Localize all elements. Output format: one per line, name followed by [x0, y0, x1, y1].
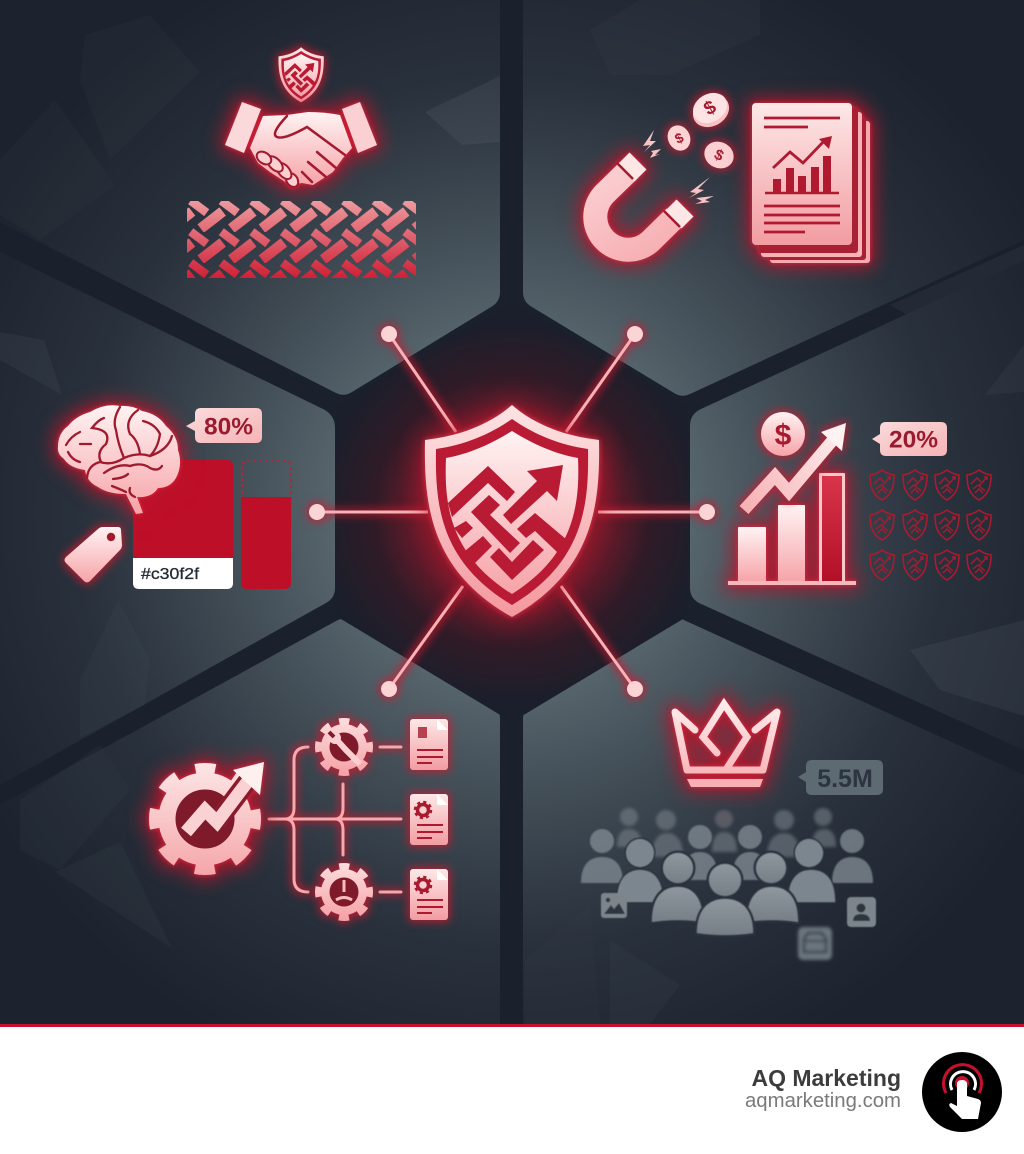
section: handshake and weave [187, 47, 416, 278]
callout: 20 percent: 20% [889, 426, 938, 454]
section: brain and colour swatch [58, 405, 291, 589]
80 percent bar [241, 461, 291, 589]
panel: bottom left [0, 618, 500, 1024]
logo [922, 1052, 1002, 1132]
icon: blurred box tile [798, 927, 832, 960]
icon: sparks [643, 130, 714, 204]
callout: 80 percent [186, 408, 262, 443]
connector lines and nodes [309, 326, 715, 697]
icon: price tag [64, 527, 122, 582]
central hub background [336, 302, 688, 722]
growth arrow [744, 423, 846, 510]
icon: coins: $ [700, 96, 720, 120]
growth bar chart [728, 473, 856, 585]
woven pattern band [187, 201, 416, 278]
icon: image tile [601, 893, 627, 918]
callout: 5.5M: 5.5M [817, 765, 873, 793]
small shield grid [870, 470, 991, 580]
section: gears and documents [156, 719, 448, 920]
icon: dollar coin [761, 412, 805, 456]
panel: right [690, 260, 1024, 750]
callout: 5.5M [798, 760, 883, 795]
icon: coins: $ [711, 146, 727, 165]
callout: 80 percent: 80% [204, 414, 253, 440]
panel: left [0, 252, 335, 785]
brand website: aqmarketing.com [745, 1090, 901, 1112]
panel: top left [0, 0, 500, 395]
icon: wrench gear [319, 722, 369, 772]
icon: brain [58, 405, 180, 514]
central shield [425, 405, 599, 617]
icon: main gear with arrow [156, 762, 264, 868]
icon: dollar coin: $ [775, 419, 792, 452]
icon: document one [410, 719, 448, 770]
icon: clock gear [319, 867, 369, 917]
footer [0, 1024, 1024, 1154]
icon: document two [410, 794, 448, 845]
icon: small shield [278, 47, 324, 102]
panel: top right [523, 0, 1024, 396]
icon: crown [675, 704, 777, 787]
section: crown and audience [581, 704, 883, 960]
section: magnet, coins and report [595, 87, 870, 263]
icon: magnet [595, 161, 685, 250]
connector tree [269, 747, 401, 892]
audience crowd [581, 808, 873, 935]
section: growth chart and shields [728, 412, 991, 585]
icon: coins: $ [672, 129, 686, 147]
icon: report stack [752, 103, 870, 263]
colour swatch [133, 460, 233, 589]
callout: 20 percent [872, 422, 947, 456]
icon: person tile [847, 897, 876, 927]
panel: bottom right [523, 618, 1024, 1024]
icon: document three [410, 869, 448, 920]
brand name: AQ Marketing [751, 1065, 901, 1091]
icon: handshake [225, 102, 377, 189]
colour swatch: #c30f2f [141, 566, 200, 583]
icon: coins [664, 87, 738, 173]
